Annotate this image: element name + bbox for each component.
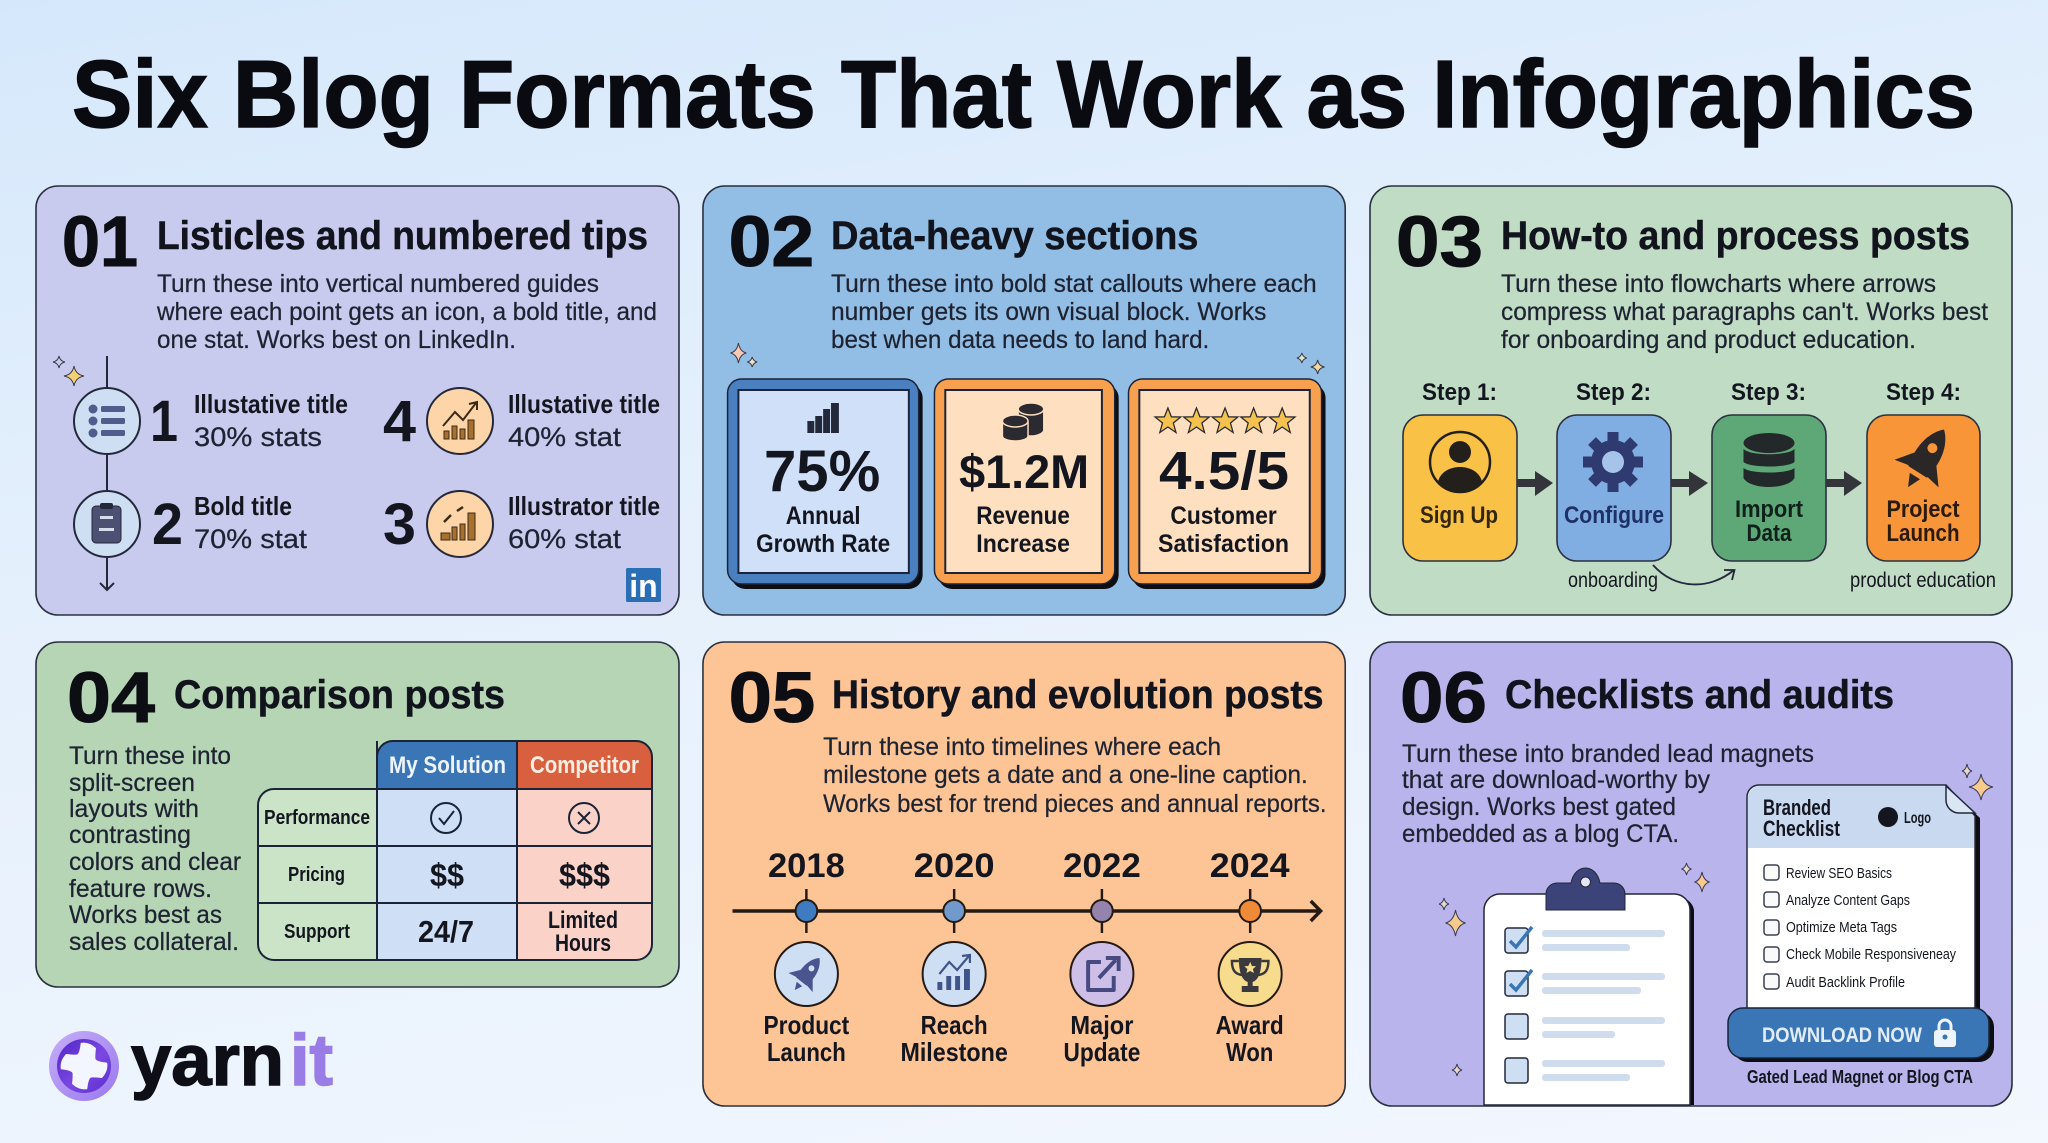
milestone 2018: 2018 bbox=[768, 847, 845, 885]
item 3: 3 bbox=[383, 492, 416, 557]
description: that are download-worthy by bbox=[1402, 766, 1710, 794]
item 3: Illustrator title bbox=[508, 491, 660, 521]
step 4: Project bbox=[1886, 496, 1960, 523]
download button: DOWNLOAD NOW bbox=[1762, 1024, 1922, 1047]
icon: coins bbox=[1002, 403, 1044, 441]
step 4: Step 4: bbox=[1886, 379, 1961, 406]
number 02: 02 bbox=[729, 202, 814, 281]
icon: lock bbox=[1934, 1020, 1956, 1047]
milestone 2024: 2024 bbox=[1210, 847, 1290, 885]
row: support: Support bbox=[284, 921, 350, 943]
icon: bars bbox=[807, 403, 839, 433]
number 04: 04 bbox=[67, 659, 156, 738]
checklist items: Analyze Content Gaps bbox=[1786, 892, 1910, 909]
step 2 bbox=[1557, 379, 1671, 561]
heading: Comparison posts bbox=[174, 673, 505, 717]
icon: LinkedIn: in bbox=[629, 568, 658, 604]
description bbox=[1402, 740, 1814, 848]
description bbox=[1501, 270, 1988, 354]
sparkles bbox=[731, 343, 1325, 374]
description: layouts with bbox=[69, 795, 199, 823]
step 3 bbox=[1712, 379, 1826, 561]
step 3: Step 3: bbox=[1731, 379, 1806, 406]
description: Turn these into branded lead magnets bbox=[1402, 740, 1814, 768]
item 4 bbox=[383, 388, 660, 454]
clipboard illustration bbox=[1484, 868, 1694, 1105]
arrow 2 bbox=[1671, 471, 1708, 496]
description: number gets its own visual block. Works bbox=[831, 299, 1266, 326]
document title: Branded bbox=[1763, 795, 1831, 820]
item 1: 30% stats bbox=[194, 422, 322, 452]
description: one stat. Works best on LinkedIn. bbox=[157, 326, 516, 354]
description: Turn these into bold stat callouts where each bbox=[831, 271, 1317, 298]
description: where each point gets an icon, a bold title, and bbox=[156, 298, 657, 326]
document logo: Logo bbox=[1904, 810, 1931, 827]
step 4 bbox=[1867, 379, 1980, 561]
milestone 2024 bbox=[1210, 847, 1290, 1067]
sparkles bbox=[53, 356, 84, 386]
number 06: 06 bbox=[1400, 659, 1487, 738]
title: Six Blog Formats That Work as Infographics bbox=[72, 41, 1975, 148]
description bbox=[831, 271, 1317, 354]
header labels: My Solution bbox=[389, 752, 506, 779]
step 1 bbox=[1403, 379, 1517, 561]
milestone 2020: 2020 bbox=[914, 847, 995, 885]
header labels bbox=[389, 752, 639, 779]
branded checklist document bbox=[1747, 785, 1980, 1010]
item 4: Illustative title bbox=[508, 389, 660, 419]
row: performance: Performance bbox=[264, 807, 370, 829]
curved arrow bbox=[1653, 565, 1734, 584]
item 1: 1 bbox=[150, 389, 178, 454]
panel: 05 history bbox=[703, 642, 1345, 1106]
step 2: Configure bbox=[1564, 502, 1664, 529]
timeline axis bbox=[733, 901, 1321, 921]
comparison table bbox=[258, 741, 652, 960]
description: embedded as a blog CTA. bbox=[1402, 820, 1679, 848]
description bbox=[823, 734, 1327, 818]
logo: yarnit bbox=[49, 1021, 333, 1101]
milestone 2020: Milestone bbox=[900, 1039, 1008, 1067]
description bbox=[156, 270, 657, 354]
item 3 bbox=[383, 491, 660, 557]
stat card: 4.5/5: Satisfaction bbox=[1158, 531, 1289, 558]
description: feature rows. bbox=[69, 875, 212, 903]
wordmark: it bbox=[290, 1021, 333, 1101]
item 1: Illustative title bbox=[194, 389, 348, 419]
heading: Checklists and audits bbox=[1505, 673, 1894, 717]
row: support: Hours bbox=[555, 930, 611, 957]
heading: Listicles and numbered tips bbox=[157, 214, 648, 258]
checklist items: Check Mobile Responsiveneay bbox=[1786, 946, 1956, 963]
item 2: 70% stat bbox=[194, 524, 308, 554]
row: support bbox=[284, 907, 618, 957]
description: best when data needs to land hard. bbox=[831, 327, 1209, 354]
panel: 03 how-to bbox=[1370, 186, 2012, 615]
stat card: $1.2M bbox=[934, 379, 1119, 589]
caption: onboarding: onboarding bbox=[1568, 569, 1658, 592]
description: milestone gets a date and a one-line caption. bbox=[823, 762, 1308, 789]
milestone 2018 bbox=[764, 847, 850, 1067]
milestone 2022: 2022 bbox=[1063, 847, 1141, 885]
checklist items: Optimize Meta Tags bbox=[1786, 919, 1897, 936]
number 03: 03 bbox=[1396, 203, 1483, 282]
document title: Checklist bbox=[1763, 816, 1841, 841]
download button bbox=[1728, 1008, 1994, 1062]
row: pricing: $$$ bbox=[559, 857, 610, 893]
step 3: Import bbox=[1735, 496, 1803, 523]
document title bbox=[1763, 795, 1841, 841]
rows bbox=[1505, 928, 1528, 1083]
number 05: 05 bbox=[729, 658, 815, 737]
description: sales collateral. bbox=[69, 928, 239, 956]
wordmark: yarn bbox=[131, 1021, 284, 1101]
panel: 04 comparison bbox=[36, 642, 679, 987]
description: Works best for trend pieces and annual reports. bbox=[823, 791, 1327, 818]
panel: 06 checklists bbox=[1370, 642, 2012, 1106]
caption: product education: product education bbox=[1850, 569, 1996, 592]
step 3: Data bbox=[1746, 520, 1792, 547]
row: pricing bbox=[288, 857, 610, 893]
description: split-screen bbox=[69, 769, 195, 797]
milestone 2020: Reach bbox=[921, 1012, 988, 1040]
description: Turn these into flowcharts where arrows bbox=[1501, 270, 1936, 298]
item 4: 4 bbox=[383, 389, 416, 454]
stat card: 4.5/5: Customer bbox=[1170, 503, 1277, 530]
item 3: 60% stat bbox=[508, 524, 622, 554]
clip bbox=[1546, 868, 1625, 910]
document logo bbox=[1878, 807, 1931, 827]
icon: five stars bbox=[1155, 408, 1295, 432]
heading: How-to and process posts bbox=[1501, 214, 1970, 258]
panel: 01 listicles bbox=[36, 186, 679, 615]
step 4: Launch bbox=[1886, 520, 1960, 547]
vertical connector arrow bbox=[100, 356, 114, 590]
icon: clipboard bbox=[74, 491, 140, 557]
header labels: Competitor bbox=[530, 752, 639, 779]
step 1: Step 1: bbox=[1422, 379, 1497, 406]
item 1 bbox=[150, 389, 348, 454]
stat card: 4.5/5 bbox=[1129, 379, 1326, 589]
description: colors and clear bbox=[69, 848, 241, 876]
sparkles bbox=[1439, 764, 1993, 1076]
description: for onboarding and product education. bbox=[1501, 326, 1916, 354]
caption: Gated Lead Magnet or Blog CTA bbox=[1747, 1067, 1973, 1087]
step 1: Sign Up bbox=[1420, 502, 1498, 529]
stat card: 4.5/5: 4.5/5 bbox=[1159, 441, 1289, 501]
stat card: $1.2M: Revenue bbox=[976, 503, 1070, 530]
description: Works best as bbox=[69, 901, 222, 929]
row: support: 24/7 bbox=[418, 914, 474, 949]
checklist items: Review SEO Basics bbox=[1786, 865, 1892, 882]
panel: 02 data-heavy bbox=[703, 186, 1345, 615]
item 2 bbox=[152, 491, 308, 557]
item 2: 2 bbox=[152, 492, 183, 557]
number 01: 01 bbox=[62, 203, 138, 282]
stat card: $1.2M: $1.2M bbox=[959, 446, 1089, 498]
description: design. Works best gated bbox=[1402, 793, 1676, 821]
description: Turn these into bbox=[69, 742, 231, 770]
milestone 2022 bbox=[1063, 847, 1141, 1067]
row: performance bbox=[264, 803, 599, 833]
description bbox=[69, 742, 241, 956]
description: contrasting bbox=[69, 821, 191, 849]
stat card: 75% bbox=[728, 379, 923, 589]
milestone 2022: Update bbox=[1063, 1039, 1140, 1067]
description: Turn these into timelines where each bbox=[823, 734, 1221, 761]
item 4: 40% stat bbox=[508, 422, 622, 452]
description: Turn these into vertical numbered guides bbox=[157, 270, 599, 298]
icon: list bbox=[74, 388, 140, 454]
milestone 2024: Award bbox=[1216, 1012, 1284, 1040]
milestone 2020 bbox=[900, 847, 1008, 1067]
row: pricing: Pricing bbox=[288, 864, 345, 886]
stat card: 75%: Annual bbox=[786, 503, 861, 530]
item 2: Bold title bbox=[194, 491, 292, 521]
milestone 2022: Major bbox=[1070, 1012, 1133, 1040]
stat card: $1.2M: Increase bbox=[976, 531, 1070, 558]
checklist items: Audit Backlink Profile bbox=[1786, 974, 1905, 991]
heading: History and evolution posts bbox=[832, 673, 1324, 717]
milestone 2018: Launch bbox=[767, 1039, 846, 1067]
step 2: Step 2: bbox=[1576, 379, 1651, 406]
arrow 1 bbox=[1517, 471, 1553, 496]
description: compress what paragraphs can't. Works best bbox=[1501, 298, 1988, 326]
row: pricing: $$ bbox=[430, 857, 464, 893]
milestone 2024: Won bbox=[1226, 1039, 1273, 1067]
milestone 2018: Product bbox=[764, 1012, 850, 1040]
heading: Data-heavy sections bbox=[831, 214, 1198, 258]
icon: logo mark bbox=[49, 1031, 119, 1101]
stat card: 75%: 75% bbox=[764, 440, 880, 504]
checklist items bbox=[1764, 865, 1956, 991]
row: support: Limited bbox=[548, 907, 618, 934]
stat card: 75%: Growth Rate bbox=[756, 531, 890, 558]
arrow 3 bbox=[1826, 471, 1862, 496]
